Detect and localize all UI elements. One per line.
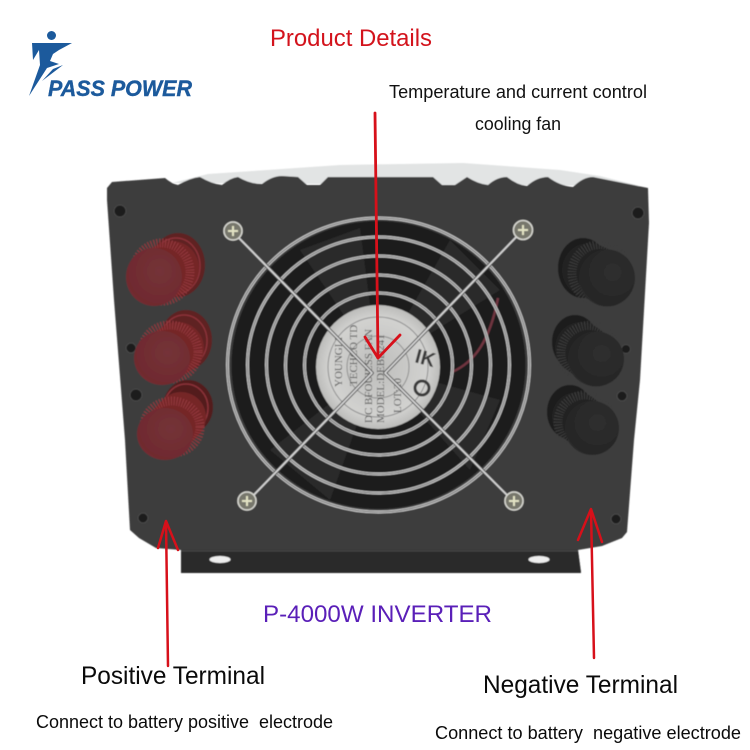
- fan callout text: Temperature and current control: [389, 81, 647, 102]
- inverter photo: [107, 163, 649, 573]
- title: Product Details: [270, 25, 432, 52]
- product name: P-4000W INVERTER: [263, 601, 492, 628]
- fan blades: [270, 228, 500, 500]
- negative terminal label: [435, 671, 741, 743]
- logo: Pass Power: [29, 31, 192, 101]
- fan hub label: DC BFOUILSS FAN: [363, 329, 375, 423]
- guard mounting screw 4: [505, 492, 523, 510]
- arrow: to negative terminal: [578, 509, 602, 658]
- cooling fan: [224, 218, 532, 512]
- inverter top surface: [172, 163, 640, 186]
- logo wordmark: PASS POWER: [48, 76, 192, 101]
- icon: running figure: [29, 31, 72, 96]
- arrow: to cooling fan: [365, 113, 400, 358]
- guard mounting screw 1: [224, 222, 242, 240]
- red terminal 2: [134, 310, 212, 385]
- negative terminals: [547, 238, 635, 455]
- negative terminal label: Negative Terminal: [483, 671, 678, 699]
- black terminal 2: [552, 315, 624, 386]
- mounting bracket: [181, 550, 581, 573]
- fan callout text: cooling fan: [475, 113, 561, 134]
- fan guard cross wire highlight: [233, 230, 523, 502]
- fan hub label: IK: [413, 346, 438, 372]
- guard mounting screw 3: [238, 492, 256, 510]
- red terminal 3: [137, 380, 213, 460]
- fan callout text: [389, 81, 647, 134]
- fan hub label: LOT:20: [392, 378, 404, 413]
- red terminal 1: [126, 233, 205, 306]
- inverter body: [107, 176, 649, 572]
- fan hub label: [316, 305, 440, 429]
- guard mounting screw 2: [514, 220, 532, 240]
- positive terminal label: Connect to battery positive electrode: [36, 712, 333, 732]
- arrow: to positive terminal: [158, 521, 178, 666]
- fan guard rings: [228, 218, 530, 512]
- fan housing: [232, 221, 526, 509]
- fan hub label: TECHCO TD: [348, 325, 360, 386]
- positive terminal label: [36, 662, 333, 732]
- negative terminal label: Connect to battery negative electrode: [435, 723, 741, 743]
- fan guard cross wires: [233, 230, 523, 502]
- positive terminals: [126, 233, 213, 460]
- fan hub label: MODEL:DEBD241: [375, 334, 387, 423]
- fan hub label: YOUNGLI: [333, 337, 345, 387]
- red fan wire: [452, 298, 498, 372]
- positive terminal label: Positive Terminal: [81, 662, 265, 690]
- fan guard ring shading: [228, 218, 530, 512]
- corner screws: [114, 205, 644, 524]
- black terminal 3: [547, 385, 619, 455]
- black terminal 1: [558, 238, 635, 306]
